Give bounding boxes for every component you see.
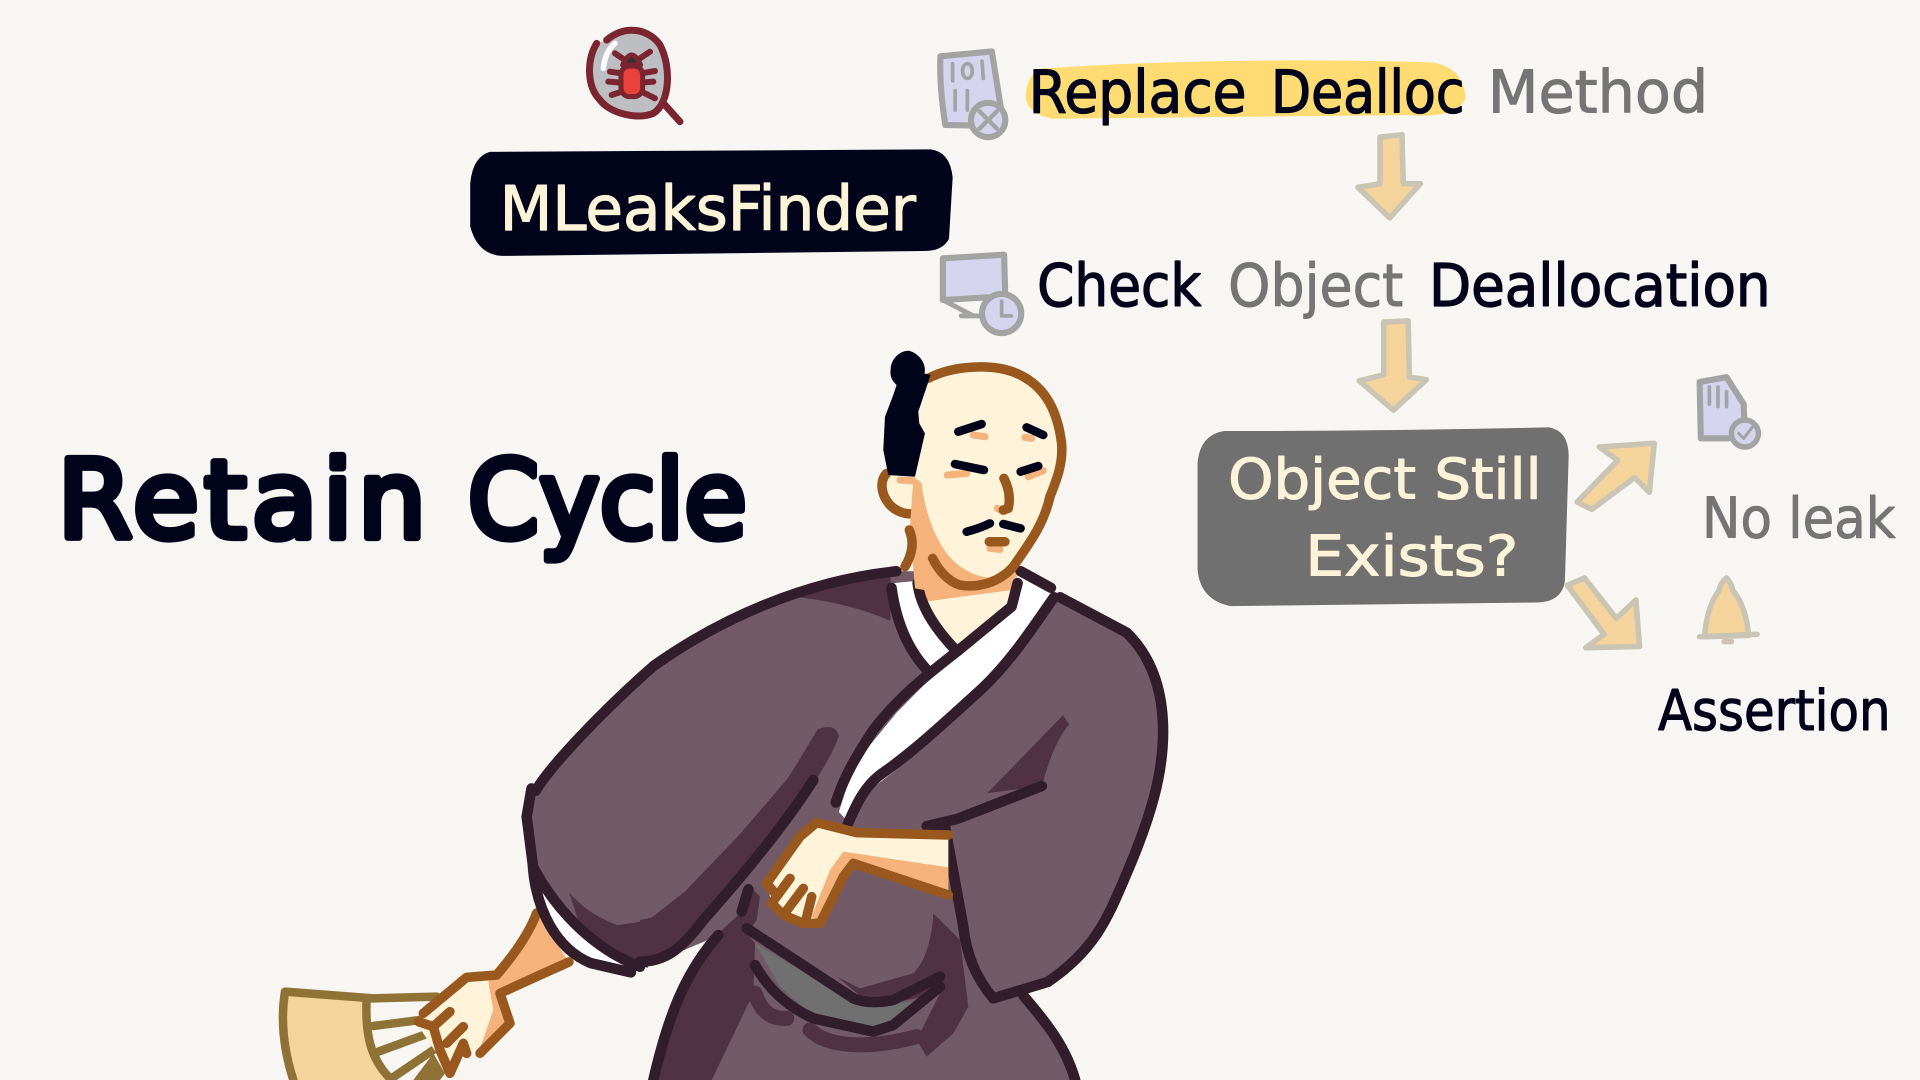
title: Retain Cycle: Cycle <box>468 439 747 564</box>
icon: document with check <box>1700 377 1758 447</box>
illustration: samurai with fan <box>283 351 1163 1080</box>
fan and left hand <box>283 913 569 1080</box>
step: Check Object Deallocation: Deallocation <box>1429 251 1771 320</box>
decision box: Object Still Exists?: Exists? <box>1305 525 1518 590</box>
decision box: Object Still Exists? <box>1198 427 1569 606</box>
icon: bug under magnifier <box>590 30 680 122</box>
step: Replace Dealloc Method: Method <box>1488 58 1708 127</box>
arrow: down right <box>1567 578 1640 648</box>
title: Retain Cycle: Retain <box>58 439 426 564</box>
icon: bell <box>1700 578 1757 642</box>
label: No leak: No leak <box>1702 487 1896 552</box>
lower robe, belt and right hand <box>640 780 968 1080</box>
decision box: Object Still Exists?: Object Still <box>1228 447 1542 512</box>
head <box>882 351 1062 596</box>
badge: MLeaksFinder: MLeaksFinder <box>500 174 917 245</box>
step: Replace Dealloc Method: Dealloc <box>1271 58 1464 127</box>
arrow: down 1 <box>1358 135 1420 218</box>
title: Retain Cycle <box>58 439 747 564</box>
step: Check Object Deallocation <box>1037 251 1771 320</box>
label: Assertion: Assertion <box>1658 679 1891 744</box>
step: Check Object Deallocation: Object <box>1228 251 1403 320</box>
arrow: down 2 <box>1359 321 1427 410</box>
arrow: up right <box>1577 443 1654 509</box>
icon: monitor with clock <box>943 255 1021 333</box>
step: Check Object Deallocation: Check <box>1037 251 1201 320</box>
badge: MLeaksFinder <box>470 149 953 256</box>
step: Replace Dealloc Method <box>1026 58 1708 127</box>
robe <box>527 529 1163 1080</box>
icon: document with cross <box>940 51 1005 137</box>
step: Replace Dealloc Method: Replace <box>1029 58 1247 127</box>
